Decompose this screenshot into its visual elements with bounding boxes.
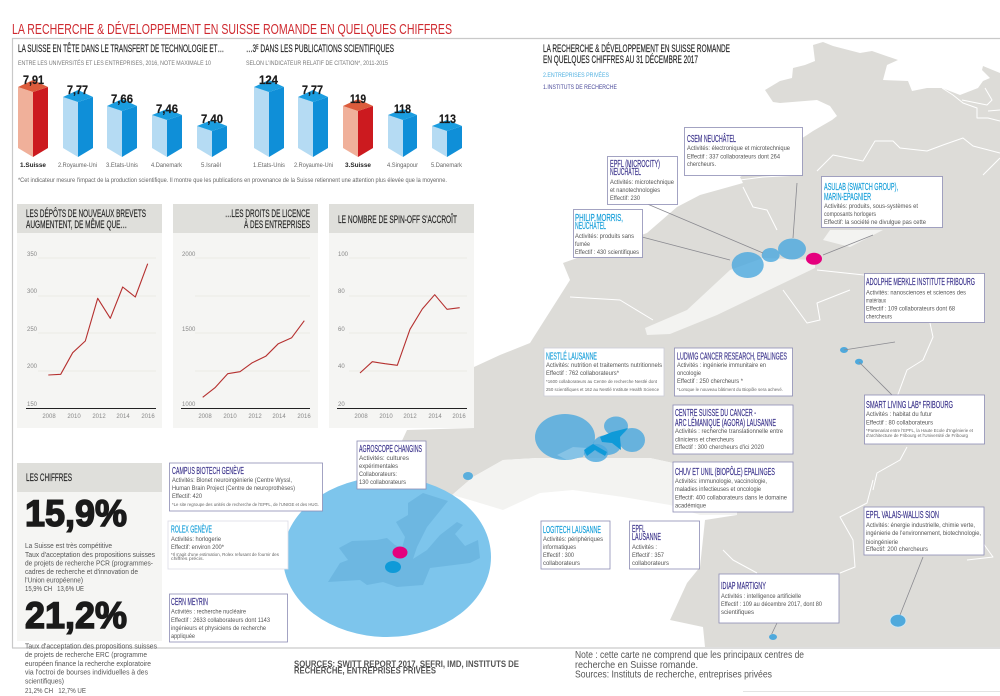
callout: EPFL Lausanne: EPFL — [632, 524, 645, 535]
bar: Danemark 7,46 — [151, 104, 183, 169]
text block: PCR: l'Union européenne) — [25, 578, 83, 584]
callout: CSEM Neuchâtel: CSEM NEUCHÂTEL — [687, 132, 736, 145]
bar: Suisse 7,91 — [18, 75, 48, 169]
callout: Ludwig Cancer Research: Effectif : 250 chercheurs * — [677, 378, 743, 385]
callout: Philip Morris — [574, 210, 642, 258]
Geneva zoom circle — [283, 477, 491, 637]
callout: Agroscope Changins: expérimentales — [359, 463, 398, 470]
x axis labels: 2012 — [248, 414, 262, 420]
callout: Agroscope Changins: 130 collaborateurs — [359, 479, 406, 486]
footnote: citation indicator: *Cet indicateur mesure l'impact de la production scientifique. Il montre que les publications en provenance de la Suisse retiennent une attention plus élevée que la moyenne. — [18, 178, 447, 184]
main title: LA RECHERCHE & DÉVELOPPEMENT EN SUISSE ROMANDE EN QUELQUES CHIFFRES — [12, 21, 452, 38]
callout: Nestlé Lausanne: 250 scientifiques et 162 au Nestlé Institute Health Science — [546, 387, 660, 392]
bar: Israël 7,40 — [197, 114, 227, 169]
callout: Smart Living Lab: d'architecture de Fribourg et l'Université de Fribourg — [866, 433, 969, 438]
x axis labels: 2010 — [379, 414, 393, 420]
x axis labels: 2016 — [141, 414, 155, 420]
note — [575, 650, 804, 680]
bar: Singapour 118: 4.Singapour — [387, 163, 418, 169]
callout: Logitech Lausanne: Effectif : 300 — [543, 552, 574, 559]
callout: EPFL Valais: bioingénierie — [866, 539, 898, 546]
callout: EPFL Valais — [864, 507, 984, 555]
callout: Idiap Martigny — [719, 574, 839, 623]
callout: Logitech Lausanne: informatiques — [543, 544, 576, 551]
stat: 15,9%: 15,9% — [25, 493, 127, 534]
map of western Switzerland — [400, 42, 1000, 647]
bar: Royaume-Uni 7,77: 7,77 — [67, 85, 88, 97]
heading: publications: DANS LES PUBLICATIONS SCIENTIFIQUES — [259, 43, 394, 55]
callout: Rolex Genève: Effectif: environ 200* — [171, 544, 224, 551]
text block: PCR: 15,9% CH 13,6% UE — [25, 586, 84, 593]
leader lines — [642, 183, 923, 634]
callout: EPFL Microcity: NEUCHÂTEL — [610, 165, 641, 178]
x axis labels — [354, 414, 466, 420]
callout: Campus Biotech Genève: Effectif: 420 — [172, 493, 202, 500]
callout: EPFL Valais: Effectif: 200 chercheurs — [866, 546, 928, 553]
callout: EPFL Lausanne: Effectif : 357 — [632, 552, 664, 559]
bar: Suisse 7,91: 7,91 — [23, 75, 45, 87]
x axis labels: 2014 — [428, 414, 442, 420]
callout: Logitech Lausanne: collaborateurs — [543, 560, 580, 567]
marker: CERN Meyrin — [385, 561, 401, 573]
map heading: LA RECHERCHE & DÉVELOPPEMENT EN SUISSE ROMANDE — [543, 42, 730, 55]
callout: CHUV et UNIL — [673, 462, 793, 512]
callout: Logitech Lausanne: LOGITECH LAUSANNE — [543, 525, 601, 536]
x axis labels: 2012 — [92, 414, 106, 420]
text block: ERC — [25, 644, 157, 695]
callout: Idiap Martigny: Effectif : 109 au décembre 2017, dont 80 — [721, 601, 822, 608]
bar: Royaume-Uni 7,77: 2.Royaume-Uni — [58, 163, 97, 169]
callout: Philip Morris: Effectif : 430 scientifiques — [575, 249, 639, 256]
callout: CHUV et UNIL: académique — [675, 502, 706, 510]
bar: Etats-Unis 7,66: 7,66 — [111, 94, 133, 106]
callout: Nestlé Lausanne: Effectif : 762 collaborateurs* — [546, 370, 619, 377]
callout: Smart Living Lab: Effectif : 80 collaborateurs — [866, 420, 933, 426]
callout: Idiap Martigny: Activités : intelligence artificielle — [721, 593, 801, 600]
callout: Rolex Genève — [168, 521, 288, 569]
callout: EPFL Lausanne: LAUSANNE — [632, 532, 661, 543]
Fribourg markers — [840, 347, 863, 365]
callout: Philip Morris: NEUCHÂTEL — [575, 219, 606, 232]
callout: CERN Meyrin: Activités : recherche nucléaire — [171, 608, 246, 616]
x axis labels — [42, 414, 155, 420]
y axis labels: 80 — [338, 289, 345, 295]
callout: CHUV et UNIL: maladies infectieuses et oncologie — [675, 486, 761, 493]
y axis labels: 150 — [27, 402, 38, 408]
bar: Israël 7,40: 7,40 — [201, 114, 223, 126]
heading: licences — [225, 208, 310, 231]
callout: Philip Morris: Activités: produits sans — [575, 233, 634, 240]
heading: patents: AUGMENTENT, DE MÊME QUE… — [26, 218, 127, 231]
bar: Royaume-Uni 7,77 — [58, 85, 97, 169]
bar: Etats-Unis 124 — [253, 75, 285, 169]
callout: EPFL Lausanne: collaborateurs — [632, 560, 669, 567]
x axis labels: 2010 — [223, 414, 237, 420]
callout: CHUV et UNIL: Effectif: 400 collaborateurs dans le domaine — [675, 494, 787, 502]
note: recherche en Suisse romande. — [575, 660, 698, 671]
Lausanne markers — [535, 414, 645, 462]
bar: Royaume-Uni 7,77: 2.Royaume-Uni — [294, 163, 333, 169]
callout: EPFL Microcity: Effectif: 230 — [610, 195, 640, 202]
bar: Royaume-Uni 7,77 — [294, 85, 333, 169]
callout: Ludwig Cancer Research — [674, 348, 792, 396]
sources — [294, 659, 519, 676]
callout: Asulab: Effectif: la société ne divulgue pas cette — [824, 219, 926, 226]
callout: EPFL Microcity: EPFL (MICROCITY) — [610, 159, 660, 170]
text block: ERC: 21,2% CH 12,7% UE — [25, 688, 86, 695]
callout: Agroscope Changins: Activités: cultures — [359, 455, 409, 462]
callout: Asulab: ASULAB (SWATCH GROUP), — [824, 182, 898, 193]
text block: ERC: Taux d'acceptation des propositions suisses — [25, 644, 157, 650]
callout: Nestlé Lausanne: *1600 collaborateurs au Centre de recherche Nestlé dont — [546, 379, 658, 384]
callout: Campus Biotech Genève: *Le site regroupe des unités de recherche de l'EPFL, de l'UNIGE et des HUG. — [172, 502, 319, 507]
x axis labels: 2010 — [67, 414, 81, 420]
callout: Adolphe Merkle: Effectif : 109 collaborateurs dont 68 — [866, 306, 955, 312]
bar: Danemark 7,46: 4.Danemark — [151, 163, 183, 169]
callout: Asulab — [822, 176, 942, 228]
sources: SOURCES: SWITT REPORT 2017, SEFRI, IMD, INSTITUTS DE — [294, 659, 519, 669]
callout: Logitech Lausanne — [541, 521, 610, 569]
callout: EPFL Microcity: Activités: microtechnique — [610, 179, 674, 186]
callout: Rolex Genève: *Il s'agit d'une estimation, Rolex refusant de fournir des — [171, 552, 280, 557]
note: Note : cette carte ne comprend que les principaux centres de — [575, 650, 804, 661]
legend: 1.INSTITUTS DE RECHERCHE — [543, 85, 617, 91]
x axis labels: 2014 — [272, 414, 286, 420]
callout: Logitech Lausanne: Activités: périphériques — [543, 536, 603, 543]
callout: Ludwig Cancer Research: Activités : ingénierie immunitaire en — [677, 362, 766, 369]
callout: Asulab: MARIN-EPAGNIER — [824, 192, 871, 203]
callout: Smart Living Lab — [864, 395, 984, 444]
marker: Martigny — [769, 634, 777, 640]
y axis labels: 1000 — [182, 402, 196, 408]
y axis labels: 1500 — [182, 327, 196, 333]
stat: 21,2%: 21,2% — [25, 595, 127, 636]
callout: Rolex Genève: chiffres précis. — [171, 556, 204, 561]
heading: patents: LES DÉPÔTS DE NOUVEAUX BREVETS — [26, 207, 146, 220]
heading: les chiffres: LES CHIFFRES — [26, 472, 72, 484]
bar: Etats-Unis 7,66 — [106, 94, 138, 169]
callout: EPFL Valais: Activités: énergie industrielle, chimie verte, — [866, 522, 975, 529]
x axis labels: 2012 — [403, 414, 417, 420]
callout: Smart Living Lab: Activités : habitat du futur — [866, 411, 933, 418]
bar: Etats-Unis 7,66: 3.Etats-Unis — [106, 163, 138, 169]
bar: Etats-Unis 124: 1.Etats-Unis — [253, 163, 285, 169]
callout: Centre suisse du cancer: ARC LÉMANIQUE (AGORA) LAUSANNE — [675, 416, 776, 429]
callout: Agroscope Changins: Collaborateurs: — [359, 471, 397, 478]
callout: Philip Morris: fumée — [575, 241, 590, 248]
callout: CHUV et UNIL: Activités: immunologie, vaccinologie, — [675, 478, 767, 485]
heading: licences: …LES DROITS DE LICENCE — [225, 208, 310, 220]
subheading: technology transfer: ENTRE LES UNIVERSITÉS ET LES ENTREPRISES, 2016, NOTE MAXIMALE 10 — [18, 60, 212, 67]
bar: Suisse 119: 3.Suisse — [345, 163, 372, 169]
callout: Agroscope Changins: AGROSCOPE CHANGINS — [359, 444, 422, 455]
map heading: EN QUELQUES CHIFFRES AU 31 DÉCEMBRE 2017 — [543, 53, 698, 66]
x axis labels: 2016 — [452, 414, 466, 420]
callout: Campus Biotech Genève: CAMPUS BIOTECH GENÈVE — [172, 464, 244, 477]
y axis labels: 20 — [338, 402, 345, 408]
y axis labels: 350 — [27, 252, 38, 258]
callout: Nestlé Lausanne — [544, 348, 664, 396]
callout: CERN Meyrin: CERN MEYRIN — [171, 597, 208, 608]
y axis labels — [338, 252, 349, 408]
line: spin-off — [360, 295, 460, 373]
callout: EPFL Lausanne — [630, 521, 700, 569]
callout: Campus Biotech Genève: Human Brain Project (Centre de neuroprothèses) — [172, 485, 295, 492]
line: patents — [48, 264, 148, 375]
marker: Sion — [890, 614, 906, 627]
callout: Nestlé Lausanne: NESTLÉ LAUSANNE — [546, 350, 597, 362]
callout: CHUV et UNIL: CHUV ET UNIL (BIOPÔLE) EPALINGES — [675, 465, 775, 478]
callout: Centre suisse du cancer — [673, 405, 793, 454]
y axis labels: 250 — [27, 327, 38, 333]
callout: Philip Morris: PHILIP MORRIS, — [575, 213, 623, 224]
text block: ERC: européen finance la recherche exploratoire — [25, 661, 151, 668]
callout: CERN Meyrin — [170, 594, 288, 642]
bar: Danemark 113: 113 — [439, 114, 456, 126]
x axis labels: 2014 — [116, 414, 130, 420]
text block: PCR: cadres de recherche et d'innovation de — [25, 569, 138, 576]
sources: RECHERCHE, ENTREPRISES PRIVÉES — [294, 666, 436, 676]
callout: Campus Biotech Genève: Activités: Blonet neuroingénierie (Centre Wyssl, — [172, 477, 292, 484]
Neuchâtel markers — [732, 238, 822, 278]
callout: Rolex Genève: Activités: horlogerie — [171, 536, 221, 543]
legend: 2.ENTREPRISES PRIVÉES — [543, 72, 609, 79]
heading: licences: À DES ENTREPRISES — [244, 218, 310, 231]
callout: Agroscope Changins — [357, 441, 426, 489]
callout: Smart Living Lab: *Partenariat entre l'EPFL, la Haute Ecole d'Ingénierie et — [866, 428, 974, 433]
y axis labels — [182, 252, 196, 408]
bar: Danemark 7,46: 7,46 — [156, 104, 178, 116]
x axis labels: 2008 — [42, 414, 56, 420]
text block: PCR — [25, 543, 155, 593]
callout: Adolphe Merkle — [864, 274, 984, 322]
bar: Danemark 113: 5.Danemark — [431, 163, 463, 169]
callout: Ludwig Cancer Research: LUDWIG CANCER RESEARCH, EPALINGES — [677, 352, 787, 362]
text block: ERC: scientifiques) — [25, 678, 64, 686]
callout: EPFL Microcity — [608, 156, 678, 204]
bar: Suisse 119 — [343, 94, 373, 169]
y axis labels — [27, 252, 38, 408]
bar: Royaume-Uni 7,77: 7,77 — [302, 85, 323, 97]
x axis labels: 2016 — [297, 414, 311, 420]
note: Sources: Instituts de recherche, entreprises privées — [575, 670, 772, 680]
heading: technology transfer: LA SUISSE EN TÊTE DANS LE TRANSFERT DE TECHNOLOGIE ET… — [18, 42, 224, 55]
callout: CSEM Neuchâtel — [684, 128, 802, 176]
x axis labels: 2008 — [354, 414, 368, 420]
callout: Idiap Martigny: scientifiques — [721, 609, 754, 616]
callout: EPFL Valais: EPFL VALAIS-WALLIS SION — [866, 510, 939, 521]
callout: Asulab: composants horlogers — [824, 211, 876, 218]
callout: Nestlé Lausanne: Activités: nutrition et traitements nutritionnels — [546, 362, 662, 369]
callout: Adolphe Merkle: chercheurs — [866, 314, 892, 320]
callout: Ludwig Cancer Research: *Lorsque le nouveau bâtiment du Biopôle sera achevé. — [677, 387, 783, 392]
panel: les chiffres — [17, 463, 162, 695]
y axis labels: 40 — [338, 364, 345, 370]
callout: Rolex Genève: ROLEX GENÈVE — [171, 522, 212, 536]
bar: Suisse 7,91: 1.Suisse — [20, 163, 47, 169]
callout: Centre suisse du cancer: Activités : recherche translationnelle entre — [675, 428, 783, 435]
heading: publications: E — [256, 45, 259, 51]
y axis labels: 60 — [338, 327, 345, 333]
text block: PCR: La Suisse est très compétitive — [25, 543, 112, 550]
map heading — [543, 42, 730, 66]
y axis labels: 2000 — [182, 252, 196, 258]
panel: spin-off line chart — [329, 204, 474, 428]
text block: PCR: Taux d'acceptation des propositions suisses — [25, 552, 155, 559]
bar: Etats-Unis 124: 124 — [259, 75, 279, 87]
callout: Campus Biotech Genève — [170, 463, 322, 511]
y axis labels: 200 — [27, 364, 38, 370]
callout: Centre suisse du cancer: Effectif : 300 chercheurs d'ici 2020 — [675, 444, 764, 451]
text block: ERC: via l'octroi de bourses individuelles à des — [25, 670, 148, 676]
callout: Idiap Martigny: IDIAP MARTIGNY — [721, 581, 766, 592]
bar: Israël 7,40: 5.Israël — [201, 163, 221, 169]
heading: patents — [26, 207, 146, 231]
text block: PCR: de projets de recherche PCR (programmes- — [25, 560, 154, 568]
callout: Asulab: Activités: produits, sous-systèmes et — [824, 203, 918, 210]
legend — [543, 72, 617, 91]
panel: technology transfer ranking — [18, 42, 227, 169]
bar: Suisse 119: 119 — [350, 94, 366, 106]
callout: Adolphe Merkle: Activités: nanosciences et sciences des — [866, 290, 966, 296]
callout: Centre suisse du cancer: cliniciens et chercheurs — [675, 436, 734, 444]
text block: ERC: de projets de recherche ERC (programme — [25, 652, 147, 659]
x axis labels: 2008 — [198, 414, 212, 420]
heading: publications: …3 — [246, 43, 263, 55]
panel: patents line chart — [17, 204, 162, 428]
callout: EPFL Valais: ingénierie de l'environnement, biotechnologie, — [866, 530, 981, 537]
y axis labels: 300 — [27, 289, 38, 295]
callout: CERN Meyrin: Effectif : 2633 collaborateurs dont 1143 — [171, 617, 270, 624]
marker: Agroscope Changins — [463, 472, 473, 480]
y axis labels: 100 — [338, 252, 349, 258]
line: licences — [203, 321, 304, 397]
bar: Singapour 118 — [387, 104, 418, 169]
panel: licences line chart — [173, 204, 318, 428]
panel: scientific publications ranking — [246, 43, 463, 169]
x axis labels — [198, 414, 311, 420]
callout: CSEM Neuchâtel: Activités: électronique et microtechnique — [687, 145, 790, 152]
heading: spin-off: LE NOMBRE DE SPIN-OFF S'ACCROÎT — [338, 213, 457, 226]
bar: Singapour 118: 118 — [394, 104, 412, 116]
callout: Ludwig Cancer Research: oncologie — [677, 370, 701, 377]
callout: EPFL Lausanne: Activités : — [632, 544, 657, 551]
subheading: publications: SELON L'INDICATEUR RELATIF DE CITATION*, 2011-2015 — [246, 61, 389, 67]
callout: CSEM Neuchâtel: chercheurs. — [687, 161, 716, 168]
callout: Centre suisse du cancer: CENTRE SUISSE DU CANCER - — [675, 408, 756, 419]
callout: CERN Meyrin: ingénieurs et physiciens de recherche — [171, 625, 266, 632]
callout: CSEM Neuchâtel: Effectif : 337 collaborateurs dont 264 — [687, 154, 780, 160]
callout: CERN Meyrin: appliquée — [171, 633, 195, 640]
marker: Rolex Genève — [392, 546, 408, 558]
bar: Danemark 113 — [431, 114, 463, 169]
callout: Adolphe Merkle: matériaux — [866, 298, 887, 304]
callout: EPFL Microcity: et nanotechnologies — [610, 187, 660, 194]
